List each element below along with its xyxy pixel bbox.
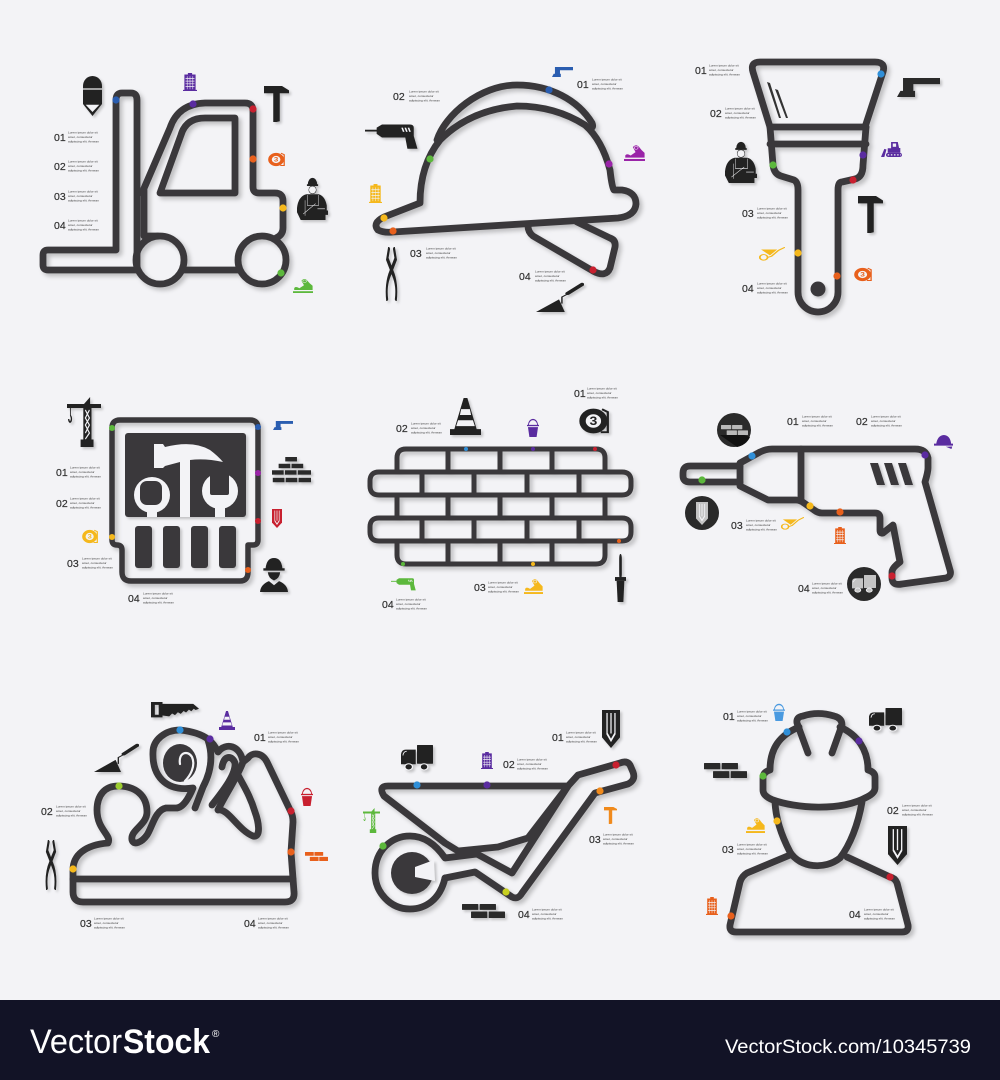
icon: hammer xyxy=(604,807,617,824)
icon: building xyxy=(183,73,197,91)
label 03 xyxy=(722,842,768,856)
label 04 xyxy=(382,597,427,611)
label 03 xyxy=(67,556,113,570)
brush handle hole xyxy=(810,282,826,296)
icon: truck xyxy=(401,745,433,770)
label 04: amet, consectetur xyxy=(757,286,782,290)
label 02: 02 xyxy=(393,91,405,103)
brush bristle marks xyxy=(767,82,788,118)
icon: bricks xyxy=(704,763,747,778)
icon: hand axe xyxy=(897,78,940,97)
worker line track xyxy=(730,714,908,932)
icon: circle with truck xyxy=(847,567,881,601)
icon: building xyxy=(834,527,846,544)
label 03 xyxy=(80,916,125,930)
paint brush line track xyxy=(752,62,884,312)
label 02: amet, consectetur xyxy=(70,501,95,505)
label 02: amet, consectetur xyxy=(725,111,750,115)
label 02: adipiscing elit. Aenean xyxy=(70,505,101,509)
icon: tape measure xyxy=(84,530,97,542)
image reference URL text: VectorStock.com/10345739 xyxy=(725,1037,971,1058)
label 04: 04 xyxy=(54,220,66,232)
label 04: amet, consectetur xyxy=(535,274,560,278)
icon: pencil xyxy=(888,826,907,865)
label 04: adipiscing elit. Aenean xyxy=(396,606,427,610)
label 04 xyxy=(849,907,895,921)
label 02: 02 xyxy=(856,416,868,428)
icon: building xyxy=(706,897,718,915)
label 03: amet, consectetur xyxy=(68,194,93,198)
label 03: adipiscing elit. Aenean xyxy=(757,215,788,219)
label 02: 02 xyxy=(41,806,53,818)
label 04: amet, consectetur xyxy=(143,596,168,600)
label 01: adipiscing elit. Aenean xyxy=(70,474,101,478)
label 02: amet, consectetur xyxy=(517,762,542,766)
label 03: Lorem ipsum dolor sit xyxy=(757,206,787,210)
icon: pencil xyxy=(602,710,620,748)
label 04: 04 xyxy=(518,909,530,921)
label 03: amet, consectetur xyxy=(488,585,513,589)
icon: crane xyxy=(67,397,101,447)
icon: builder xyxy=(260,558,288,592)
label 01: 01 xyxy=(723,711,735,723)
label 02: 02 xyxy=(396,423,408,435)
label 02 xyxy=(56,496,101,510)
label 01: adipiscing elit. Aenean xyxy=(68,139,99,143)
label 04: Lorem ipsum dolor sit xyxy=(258,916,288,920)
label 04: Lorem ipsum dolor sit xyxy=(68,218,98,222)
label 03: Lorem ipsum dolor sit xyxy=(746,518,776,522)
label 02: Lorem ipsum dolor sit xyxy=(409,89,439,93)
label 01: Lorem ipsum dolor sit xyxy=(709,63,739,67)
wheel hub xyxy=(391,852,435,894)
label 01 xyxy=(723,709,768,723)
label 03: Lorem ipsum dolor sit xyxy=(82,556,112,560)
label 01: Lorem ipsum dolor sit xyxy=(592,77,622,81)
label 04: amet, consectetur xyxy=(532,912,557,916)
label 01: 01 xyxy=(787,416,799,428)
label 03: Lorem ipsum dolor sit xyxy=(426,246,456,250)
icon: helmet xyxy=(934,435,953,449)
hard hat line track xyxy=(376,85,636,274)
panel: wood plane xyxy=(41,702,328,930)
label 01: Lorem ipsum dolor sit xyxy=(268,730,298,734)
label 02 xyxy=(856,414,902,428)
wood plane route dots xyxy=(69,726,295,873)
label 01 xyxy=(787,414,833,428)
icon: hammer xyxy=(264,86,289,122)
label 01: adipiscing elit. Aenean xyxy=(566,739,597,743)
label 04: Lorem ipsum dolor sit xyxy=(396,597,426,601)
brick wall route dots xyxy=(401,447,621,566)
drill route dots xyxy=(698,451,929,580)
label 03: adipiscing elit. Aenean xyxy=(82,565,113,569)
VectorStock logo xyxy=(30,1023,220,1061)
label 02: Lorem ipsum dolor sit xyxy=(871,414,901,418)
label 03: amet, consectetur xyxy=(426,251,451,255)
label 01 xyxy=(56,465,101,479)
label 03: Lorem ipsum dolor sit xyxy=(94,916,124,920)
label 03: amet, consectetur xyxy=(603,837,628,841)
tool panel with hammer and wrench cutouts xyxy=(125,433,246,517)
label 03: 03 xyxy=(589,834,601,846)
label 02: 02 xyxy=(887,805,899,817)
label 04: Lorem ipsum dolor sit xyxy=(812,581,842,585)
icon: wheelbarrow xyxy=(760,247,785,260)
label 03: adipiscing elit. Aenean xyxy=(68,198,99,202)
label 04: adipiscing elit. Aenean xyxy=(757,290,788,294)
icon: pliers xyxy=(47,840,55,890)
label 02: adipiscing elit. Aenean xyxy=(902,812,933,816)
label 04 xyxy=(798,581,843,595)
panel: construction worker xyxy=(704,704,933,932)
label 04 xyxy=(244,916,289,930)
label 04: Lorem ipsum dolor sit xyxy=(757,281,787,285)
label 04: 04 xyxy=(519,271,531,283)
label 02: Lorem ipsum dolor sit xyxy=(70,496,100,500)
label 01: adipiscing elit. Aenean xyxy=(592,86,623,90)
icon: bucket xyxy=(773,704,785,721)
icon: building xyxy=(481,752,493,769)
icon: bulldozer xyxy=(881,142,902,157)
icon: wood plane xyxy=(293,279,313,293)
label 02 xyxy=(396,421,442,435)
icon: bricks xyxy=(272,457,311,482)
label 03: 03 xyxy=(731,520,743,532)
label 04: adipiscing elit. Aenean xyxy=(68,227,99,231)
plane scroll blob with spiral xyxy=(163,744,197,782)
icon: circle with bricks xyxy=(717,413,751,447)
label 02: adipiscing elit. Aenean xyxy=(411,430,442,434)
label 01: adipiscing elit. Aenean xyxy=(802,423,833,427)
label 01 xyxy=(54,130,99,144)
label 01: 01 xyxy=(695,65,707,77)
label 01: amet, consectetur xyxy=(737,714,762,718)
label 01: Lorem ipsum dolor sit xyxy=(70,465,100,469)
label 03 xyxy=(742,206,788,220)
label 02: adipiscing elit. Aenean xyxy=(409,98,440,102)
label 02 xyxy=(41,804,87,818)
label 03: Lorem ipsum dolor sit xyxy=(68,189,98,193)
label 04: amet, consectetur xyxy=(68,223,93,227)
label 01: Lorem ipsum dolor sit xyxy=(587,386,617,390)
label 02 xyxy=(393,89,440,103)
footer watermark bar xyxy=(0,1000,1000,1080)
label 03: adipiscing elit. Aenean xyxy=(426,255,457,259)
label 01: amet, consectetur xyxy=(566,735,591,739)
drill grip vents xyxy=(870,463,913,485)
icon: tape measure xyxy=(583,409,608,432)
label 04: Lorem ipsum dolor sit xyxy=(864,907,894,911)
icon: bucket xyxy=(301,789,313,806)
power drill line track xyxy=(683,449,950,584)
icon: wood plane xyxy=(624,145,645,161)
label 01: Lorem ipsum dolor sit xyxy=(802,414,832,418)
icon: pliers xyxy=(387,247,396,301)
label 03: 03 xyxy=(474,582,486,594)
label 03 xyxy=(54,189,99,203)
icon: circle with pencil xyxy=(685,496,719,530)
icon: worker xyxy=(297,178,328,220)
label 03 xyxy=(589,832,634,846)
icon: screwdriver xyxy=(615,554,626,602)
label 01: amet, consectetur xyxy=(592,82,617,86)
label 02: adipiscing elit. Aenean xyxy=(68,168,99,172)
label 02: amet, consectetur xyxy=(409,94,434,98)
panel: power drill xyxy=(683,413,953,601)
label 03: adipiscing elit. Aenean xyxy=(488,589,519,593)
label 03 xyxy=(474,580,519,594)
label 01 xyxy=(254,730,299,744)
icon: worker xyxy=(725,142,757,183)
label 04: 04 xyxy=(742,283,754,295)
panel: forklift xyxy=(43,73,328,293)
label 01: 01 xyxy=(56,467,68,479)
label 02: 02 xyxy=(710,108,722,120)
label 03: Lorem ipsum dolor sit xyxy=(488,580,518,584)
label 01: 01 xyxy=(577,79,589,91)
icon: pencil xyxy=(83,76,102,116)
label 04: amet, consectetur xyxy=(864,912,889,916)
label 02: Lorem ipsum dolor sit xyxy=(902,803,932,807)
label 04 xyxy=(518,907,563,921)
label 02: amet, consectetur xyxy=(902,808,927,812)
label 04 xyxy=(54,218,99,232)
label 04: adipiscing elit. Aenean xyxy=(864,916,895,920)
label 03: 03 xyxy=(54,191,66,203)
label 03: amet, consectetur xyxy=(746,523,771,527)
label 01: Lorem ipsum dolor sit xyxy=(566,730,596,734)
label 02: Lorem ipsum dolor sit xyxy=(411,421,441,425)
icon: wood plane xyxy=(746,818,765,833)
label 02: adipiscing elit. Aenean xyxy=(56,813,87,817)
label 02 xyxy=(54,159,99,173)
VectorStock logo: Vector xyxy=(30,1023,122,1061)
label 02: adipiscing elit. Aenean xyxy=(871,423,902,427)
hard hat route dots xyxy=(380,86,613,274)
label 02: Lorem ipsum dolor sit xyxy=(517,757,547,761)
label 02: Lorem ipsum dolor sit xyxy=(725,106,755,110)
icon: trowel xyxy=(94,745,137,772)
label 01: amet, consectetur xyxy=(587,391,612,395)
icon: wheelbarrow xyxy=(782,517,804,529)
label 01: amet, consectetur xyxy=(68,135,93,139)
label 02: Lorem ipsum dolor sit xyxy=(56,804,86,808)
label 04: 04 xyxy=(128,593,140,605)
icon: scraper xyxy=(552,67,573,77)
icon: hammer xyxy=(858,196,883,233)
wheelbarrow route dots xyxy=(379,761,620,896)
label 04 xyxy=(128,591,174,605)
label 01: adipiscing elit. Aenean xyxy=(587,395,618,399)
wheelbarrow line track xyxy=(375,762,634,909)
label 03: 03 xyxy=(410,248,422,260)
label 02: amet, consectetur xyxy=(871,419,896,423)
label 02: Lorem ipsum dolor sit xyxy=(68,159,98,163)
icon: drill xyxy=(365,125,417,149)
worker route dots xyxy=(727,728,894,920)
label 01: 01 xyxy=(574,388,586,400)
wood plane line track xyxy=(73,730,294,902)
paint brush route dots xyxy=(769,70,885,280)
label 04: adipiscing elit. Aenean xyxy=(532,916,563,920)
label 01: amet, consectetur xyxy=(70,470,95,474)
label 01: amet, consectetur xyxy=(268,735,293,739)
label 04: adipiscing elit. Aenean xyxy=(258,925,289,929)
label 04: 04 xyxy=(798,583,810,595)
label 01: adipiscing elit. Aenean xyxy=(709,72,740,76)
icon: saw xyxy=(151,702,199,717)
label 01: adipiscing elit. Aenean xyxy=(737,718,768,722)
toolbox outline track xyxy=(112,420,258,581)
label 01: amet, consectetur xyxy=(709,68,734,72)
icon: traffic cone xyxy=(219,711,235,730)
icon: building xyxy=(369,184,382,203)
icon: tape measure xyxy=(856,268,871,280)
icon: bricks xyxy=(305,852,328,861)
panel: paint brush xyxy=(695,62,940,312)
label 01: Lorem ipsum dolor sit xyxy=(68,130,98,134)
label 01 xyxy=(552,730,597,744)
label 01 xyxy=(574,386,618,400)
label 03: Lorem ipsum dolor sit xyxy=(737,842,767,846)
label 03: amet, consectetur xyxy=(94,921,119,925)
label 04: 04 xyxy=(849,909,861,921)
label 03: amet, consectetur xyxy=(757,211,782,215)
label 03: adipiscing elit. Aenean xyxy=(737,851,768,855)
panel: wheelbarrow xyxy=(363,710,634,921)
icon: bricks xyxy=(462,904,505,918)
label 02 xyxy=(710,106,756,120)
icon: wood plane xyxy=(524,579,543,594)
label 01: 01 xyxy=(254,732,266,744)
label 04: Lorem ipsum dolor sit xyxy=(143,591,173,595)
label 02: 02 xyxy=(503,759,515,771)
label 04: adipiscing elit. Aenean xyxy=(812,590,843,594)
label 02: 02 xyxy=(54,161,66,173)
label 04: amet, consectetur xyxy=(812,586,837,590)
panel: toolbox xyxy=(56,397,311,605)
label 04: adipiscing elit. Aenean xyxy=(535,278,566,282)
icon: truck xyxy=(869,708,902,732)
label 01: Lorem ipsum dolor sit xyxy=(737,709,767,713)
icon: bucket xyxy=(527,420,539,437)
label 02: adipiscing elit. Aenean xyxy=(725,115,756,119)
label 03: adipiscing elit. Aenean xyxy=(603,841,634,845)
label 02: amet, consectetur xyxy=(411,426,436,430)
label 03: 03 xyxy=(722,844,734,856)
label 04 xyxy=(519,269,566,283)
label 02: 02 xyxy=(56,498,68,510)
label 04: 04 xyxy=(244,918,256,930)
icon: scraper xyxy=(273,421,293,430)
label 03: 03 xyxy=(742,208,754,220)
label 03 xyxy=(731,518,777,532)
label 04: Lorem ipsum dolor sit xyxy=(535,269,565,273)
label 03: Lorem ipsum dolor sit xyxy=(603,832,633,836)
label 02 xyxy=(503,757,548,771)
icon: trowel xyxy=(536,284,582,312)
toolbox route dots xyxy=(109,424,261,573)
label 03: 03 xyxy=(67,558,79,570)
label 03 xyxy=(410,246,457,260)
label 01 xyxy=(695,63,740,77)
icon: drill xyxy=(391,578,416,590)
label 03: adipiscing elit. Aenean xyxy=(746,527,777,531)
label 04 xyxy=(742,281,788,295)
icon: crane xyxy=(363,808,380,833)
label 04: 04 xyxy=(382,599,394,611)
label 04: amet, consectetur xyxy=(396,602,421,606)
VectorStock logo: ® xyxy=(212,1029,220,1040)
label 02: adipiscing elit. Aenean xyxy=(517,766,548,770)
label 04: adipiscing elit. Aenean xyxy=(143,600,174,604)
label 03: 03 xyxy=(80,918,92,930)
label 01: 01 xyxy=(552,732,564,744)
icon: pencil xyxy=(272,509,282,528)
label 02: amet, consectetur xyxy=(56,809,81,813)
label 02 xyxy=(887,803,933,817)
forklift route dots xyxy=(112,96,287,277)
label 03: amet, consectetur xyxy=(82,561,107,565)
toolbox compartment bars xyxy=(135,526,236,568)
icon: tape measure xyxy=(270,153,284,166)
forklift line track xyxy=(43,93,286,284)
panel: brick wall xyxy=(370,386,631,611)
icon: traffic cone xyxy=(450,398,481,435)
label 04: amet, consectetur xyxy=(258,921,283,925)
label 01 xyxy=(577,77,623,91)
brick wall line track xyxy=(370,449,631,564)
label 03: adipiscing elit. Aenean xyxy=(94,925,125,929)
label 01: adipiscing elit. Aenean xyxy=(268,739,299,743)
VectorStock logo: Stock xyxy=(123,1023,210,1061)
panel: hard hat xyxy=(365,67,645,312)
label 03: amet, consectetur xyxy=(737,847,762,851)
label 01: amet, consectetur xyxy=(802,419,827,423)
label 01: 01 xyxy=(54,132,66,144)
label 04: Lorem ipsum dolor sit xyxy=(532,907,562,911)
label 02: amet, consectetur xyxy=(68,164,93,168)
